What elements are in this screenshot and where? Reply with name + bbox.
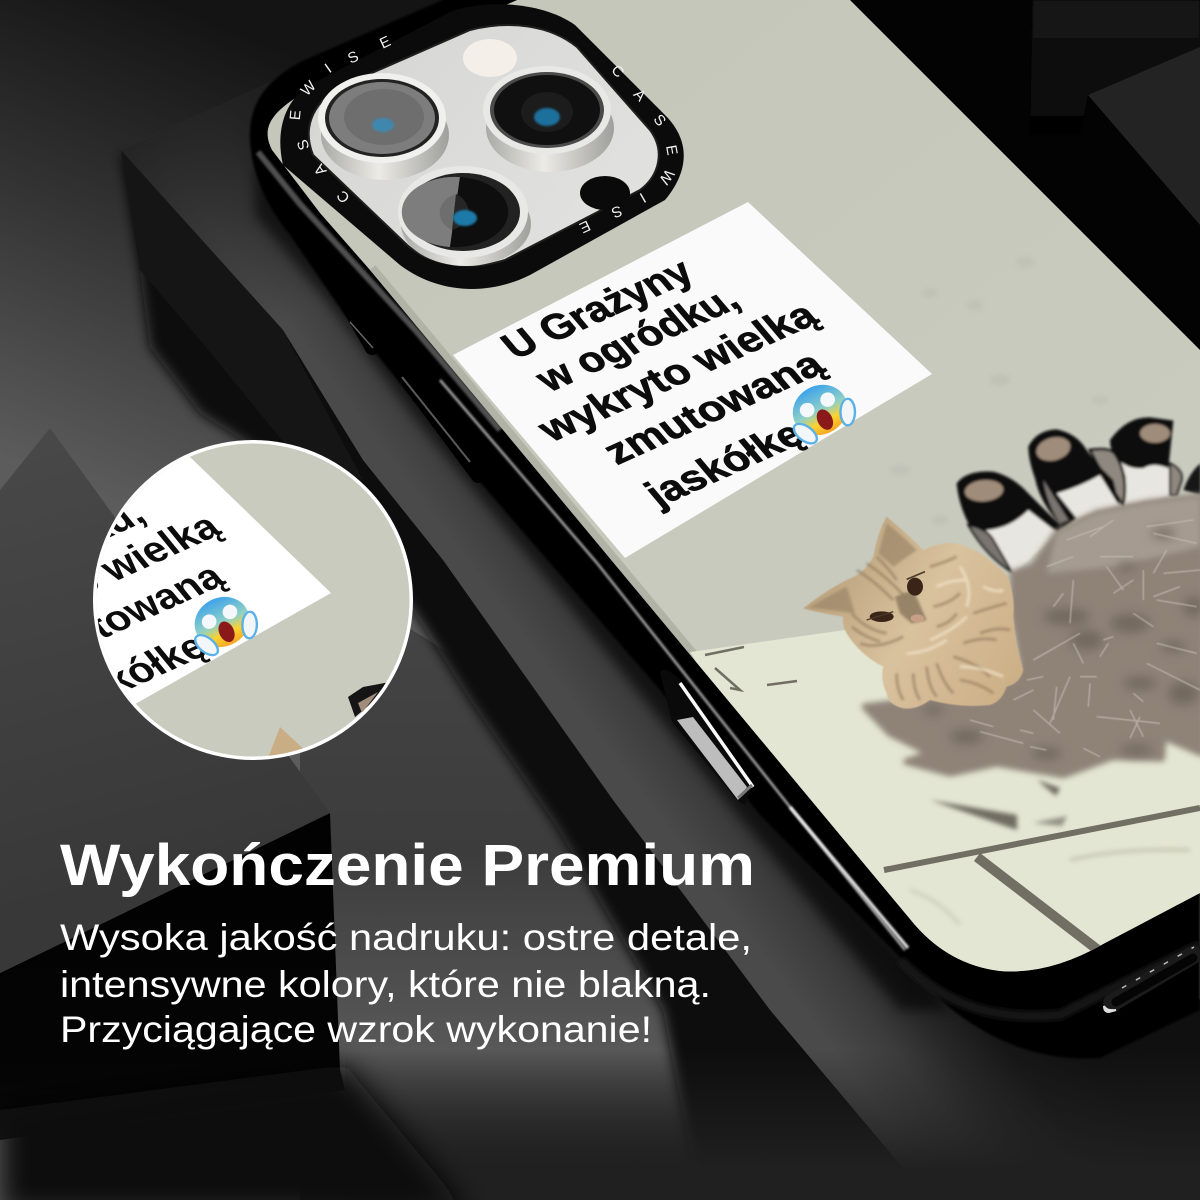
- nest shading: [923, 528, 1200, 759]
- phone case body: [250, 0, 1200, 1058]
- CASEWISE ring lettering: E: [662, 144, 681, 157]
- case frame band: [258, 152, 500, 430]
- floor: [690, 630, 1200, 972]
- lens: upper left: [318, 73, 449, 180]
- floor lines: [705, 647, 1200, 950]
- CASEWISE ring lettering: E: [377, 33, 393, 52]
- white meme sticker: [453, 202, 932, 558]
- kitten nose: [911, 614, 924, 622]
- CASEWISE ring lettering: S: [345, 48, 361, 67]
- CASEWISE ring lettering: S: [609, 202, 625, 221]
- CASEWISE ring lettering: S: [650, 111, 669, 130]
- CASEWISE ring lettering: W: [655, 166, 677, 188]
- magnified emoji: [194, 596, 258, 656]
- icon: screaming emoji: [777, 372, 865, 452]
- left foreground block: [0, 428, 470, 1200]
- phone contact shadow: [255, 160, 950, 1010]
- sticker text: zmutowaną: [594, 344, 834, 472]
- CASEWISE ring lettering: A: [311, 161, 330, 179]
- magnified sticker text: zmutowaną: [7, 556, 233, 679]
- sticker text: w ogródku,: [526, 279, 748, 400]
- CASEWISE ring lettering: C: [608, 62, 627, 81]
- CASEWISE ring lettering: C: [333, 187, 354, 206]
- CASEWISE ring lettering: I: [637, 189, 649, 206]
- wall blotches: [890, 257, 1108, 525]
- camera bumper ring: [280, 4, 684, 289]
- CASEWISE ring lettering: E: [287, 109, 305, 121]
- CASEWISE ring lettering: E: [577, 217, 593, 236]
- illustration: kitten: [803, 517, 1023, 709]
- magnified sticker text: jaskółkę: [43, 626, 216, 725]
- sticker text: jaskółkę: [635, 414, 813, 515]
- lens: upper right: [483, 66, 614, 172]
- body text: intensywne kolory, które nie blakną.: [60, 964, 711, 1005]
- lens: lower: [398, 166, 531, 266]
- case reflection line: [440, 380, 905, 950]
- magnifier circle callout: [93, 440, 413, 760]
- magnified sticker text: [96, 512, 231, 688]
- chick 3: [1090, 417, 1182, 505]
- magnified kitten ear: [268, 727, 303, 756]
- magnified sticker: [96, 457, 331, 704]
- illustration: swallow chicks: [957, 417, 1200, 575]
- kitten ear shading: [810, 523, 917, 613]
- chrome side button: [660, 670, 753, 805]
- camera island: [280, 4, 684, 289]
- phone screen artwork: [250, 0, 1200, 1000]
- illustration: nest: [865, 497, 1200, 775]
- sticker text: [493, 251, 834, 515]
- kitten nose bridge: [895, 590, 927, 623]
- kitten light fur: [907, 567, 1003, 677]
- kitten fur: [852, 557, 1010, 700]
- floor shadows: [910, 780, 1190, 925]
- kitten eyes: [867, 572, 925, 622]
- plinth side shadow: [121, 150, 960, 1200]
- camera window: [309, 25, 659, 266]
- CASEWISE ring lettering: A: [630, 86, 649, 105]
- CASEWISE ring lettering: S: [294, 137, 313, 152]
- body text: Przyciągające wzrok wykonanie!: [60, 1009, 652, 1050]
- chick 4: [1183, 463, 1200, 495]
- microphone hole: [580, 176, 630, 210]
- plinth side face: [121, 150, 363, 480]
- bottom port: [1104, 947, 1194, 1012]
- screen edge bevel: [372, 268, 917, 923]
- camera flash: [463, 39, 517, 77]
- CASEWISE ring lettering: I: [322, 60, 335, 77]
- top right dark block: [1088, 47, 1200, 225]
- magnified chick: [348, 682, 386, 717]
- sticker text: U Grażyny: [493, 251, 702, 367]
- heading: Wykończenie Premium: [60, 833, 755, 898]
- body text: Wysoka jakość nadruku: ostre detale,: [60, 917, 752, 958]
- chick 2: [1028, 429, 1120, 528]
- sticker text: wykryto wielką: [528, 294, 827, 450]
- body text: [60, 917, 752, 1050]
- chick 1: [957, 471, 1063, 575]
- side buttons: [347, 304, 478, 476]
- nest straw: [970, 520, 1200, 757]
- bottom floor fade: [345, 1050, 1200, 1200]
- CASEWISE ring lettering: W: [298, 77, 320, 100]
- CASEWISE ring lettering: [287, 33, 681, 236]
